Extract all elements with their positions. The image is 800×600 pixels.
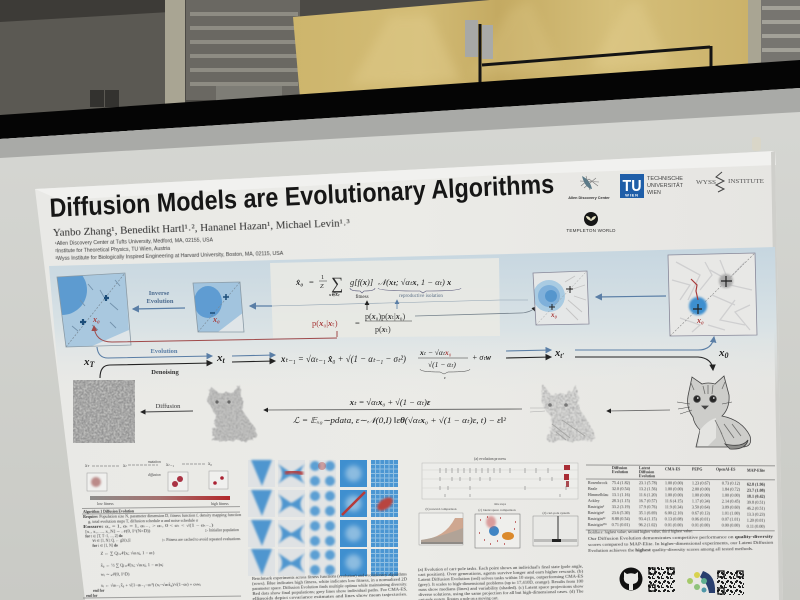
panel: fitness mapping diagram bbox=[84, 460, 230, 506]
table: method comparison: 0.67 (0.13) bbox=[692, 510, 711, 516]
table: method comparison: 28.3 (1.15) bbox=[612, 498, 631, 503]
text: cart-pole caption: (a) Evolution of cart-pole tasks. Each point shows an individual's final state (pole angle, bbox=[418, 564, 583, 573]
table: method comparison: 13.3 (0.23) bbox=[747, 512, 766, 517]
text: benchmark caption: Red dots show final populations; grey lines show individual paths. For CMA-ES, bbox=[252, 586, 407, 597]
equation: posterior mean estimator: ∑ bbox=[331, 274, 343, 293]
panel: algorithm: g, total evolution steps T, diffusion schedule α and noise schedule σ bbox=[88, 519, 198, 525]
table: method comparison: 32.0 (0.54) bbox=[612, 486, 631, 491]
logo: TU Wien: TU bbox=[622, 178, 642, 195]
logo: TU Wien: WIEN bbox=[625, 192, 639, 198]
table: method comparison: 23.6 (5.30) bbox=[612, 510, 631, 515]
panel: fitness mapping diagram: xₜ₋₁ bbox=[165, 463, 174, 468]
equation: posterior mean estimator: fitness bbox=[355, 295, 369, 300]
text: benchmark caption: (rows). Blue indicates high fitness, white indicates low fitness, in a normalized 2D bbox=[252, 576, 407, 587]
table: method comparison: Ackley bbox=[588, 498, 601, 503]
arrow: diffusion 3 bbox=[607, 410, 670, 411]
affiliations bbox=[55, 236, 284, 262]
panel: algorithm: xᵢ ← √αₜ₋₁x̂₀ + √(1−αₜ₋₁−σₜ²) (xᵢ−√αₜx̂₀)/√(1−αₜ) + σₜwᵢ bbox=[101, 582, 201, 588]
label: Denoising: Denoising bbox=[151, 369, 179, 376]
equation: posterior mean estimator: reproductive isolation bbox=[399, 294, 443, 299]
text: cart-pole caption bbox=[418, 564, 584, 600]
panel: formula box bbox=[270, 258, 500, 338]
table: method comparison: Evolution bbox=[612, 470, 629, 474]
label: Inverse Evolution: Inverse bbox=[149, 290, 169, 297]
table: method comparison: 39.8 (0.51) bbox=[747, 500, 766, 505]
text: results summary: Our Diffusion Evolution demonstrates competitive performance on quality-diversity bbox=[588, 534, 774, 541]
table: method comparison: 46.2 (0.51) bbox=[747, 506, 766, 511]
table: method comparison: 0.01 (0.00) bbox=[692, 522, 710, 528]
table: method comparison: 0.00 (0.00) bbox=[722, 523, 740, 528]
table: method comparison: 0.07 (1.01) bbox=[722, 517, 740, 522]
panel: population plot x_T bbox=[56, 272, 132, 348]
panel: algorithm: wᵢ ∼ 𝒩(0, I^D) bbox=[101, 571, 130, 578]
equation: Bayes posterior: p(x₀)p(xₜ|x₀) bbox=[365, 312, 406, 321]
affiliations: ²Institute for Theoretical Physics, TU Wien, Austria bbox=[55, 246, 170, 254]
equation: forward diffusion: xₜ = √αₜx₀ + √(1 − αₜ)ε bbox=[349, 397, 431, 407]
title: Diffusion Models are Evolutionary Algorithms bbox=[49, 169, 555, 223]
icon: QR code 2 bbox=[717, 570, 744, 595]
background: exhibition hall bbox=[0, 0, 800, 130]
equation: Bayes posterior: = bbox=[355, 318, 360, 328]
table: method comparison: PEPG bbox=[692, 467, 702, 472]
panel: fitness mapping diagram: xT bbox=[84, 464, 90, 469]
logo: Wyss Institute: WYSS bbox=[696, 179, 717, 186]
chart: reward comparison: (b) reward comparison bbox=[426, 507, 457, 511]
panel: algorithm: end for bbox=[93, 589, 105, 593]
panel: algorithm: ▷ Initialize population bbox=[205, 528, 239, 533]
panel: algorithm: ∀i ∈ [1, N]: Qᵢ ← g[f(xᵢ)] bbox=[92, 538, 130, 544]
yellow wall bbox=[293, 0, 748, 98]
equation: diffusion loss: ℒ = 𝔼ₓ₀∼pdata, ε∼𝒩(0,I) ‖ε θ(√αₜx₀ + √(1 − αₜ)ε, t) − ε‖² bbox=[293, 416, 507, 425]
panel: algorithm: for t ∈ [T, T−1, ..., 2] do bbox=[85, 534, 123, 539]
text: cart-pole caption: cart position). Over generations, agents survive longer and earn higher rewards. (b) bbox=[418, 569, 584, 578]
arrow: fitness pointer bbox=[366, 301, 368, 310]
panel: fitness mapping diagram: x₀ bbox=[207, 462, 212, 467]
chart: evolution process strip: (a) evolution process bbox=[474, 457, 506, 461]
arrow: x_t evolution bbox=[232, 355, 275, 356]
arrow: denoising to cat bbox=[575, 357, 713, 370]
panel: fitness mapping diagram: mutation bbox=[148, 460, 161, 464]
equation: posterior mean estimator: x∈Xₜ bbox=[328, 292, 340, 297]
table: method comparison: 13.1 (1.16) bbox=[612, 492, 631, 497]
label: Inverse Evolution bbox=[146, 290, 174, 305]
table: method comparison: 23.1 (5.78) bbox=[639, 480, 658, 485]
equation: Bayes posterior bbox=[312, 312, 412, 334]
panel: population plot x_T: x₀ bbox=[92, 315, 100, 324]
symbol: x_T: x bbox=[84, 356, 90, 368]
symbol: x_t': x bbox=[555, 348, 560, 359]
logo: TU Wien: UNIVERSITÄT bbox=[647, 182, 684, 189]
panel: population plot 3 bbox=[532, 270, 590, 326]
table: method comparison: 75.4 (1.82) bbox=[612, 480, 631, 485]
arrow: posterior to plot 3 bbox=[415, 307, 536, 316]
text: results summary: Boldface: highest value; second higher value; third highest value. bbox=[588, 528, 693, 535]
equation: posterior mean estimator: x̂₀ bbox=[295, 277, 303, 287]
affiliations: ³Wyss Institute for Biologically Inspired Engineering at Harvard University, Boston, MA, 02115, USA bbox=[55, 251, 284, 262]
table: method comparison: 1.00 (0.00) bbox=[665, 492, 684, 497]
chart: cart-pole actions: (d) cart-pole system bbox=[542, 511, 570, 515]
image: noisy cat bbox=[208, 385, 257, 441]
arrow: diffusion 1 bbox=[141, 411, 193, 412]
icon: QR code 1 bbox=[648, 567, 675, 592]
arrow: evolution to plot 4 bbox=[575, 337, 714, 350]
arrow: inverse evolution 2 bbox=[250, 305, 272, 307]
stand with grey signs bbox=[465, 20, 711, 85]
table: method comparison: Rastrigin² bbox=[588, 504, 605, 509]
text: cart-pole caption: diverse solutions, using the same projection for all but high-dimensional cases. (d) The bbox=[418, 589, 584, 598]
symbol: x_T: T bbox=[90, 360, 96, 369]
logo: Allen Discovery Center bbox=[568, 176, 610, 200]
panel: fitness mapping diagram: high fitness bbox=[211, 502, 229, 506]
arrow: evolution path bbox=[97, 347, 212, 358]
text: benchmark caption bbox=[252, 571, 408, 600]
logo: Wyss Institute: INSTITUTE bbox=[728, 179, 764, 185]
text: benchmark caption: parameter space. Diffusion Evolution finds multiple optima while maintaining diversity. bbox=[252, 581, 407, 591]
chart: evolution process strip bbox=[422, 457, 578, 506]
chart: benchmark fitness landscape grid bbox=[248, 460, 398, 576]
table: method comparison: Beale bbox=[588, 486, 597, 491]
text: results summary: scores compared to MAP-Elite. In higher-dimensional experiments, our Latent Diffusion bbox=[588, 540, 774, 548]
table: method comparison: 11.6 (4.15) bbox=[665, 498, 683, 503]
table: method comparison: 23.7 (1.08) bbox=[747, 488, 766, 493]
table: method comparison: 1.01 (1.00) bbox=[722, 511, 741, 516]
table: method comparison: 0.73 (0.12) bbox=[722, 481, 741, 486]
panel: population plot 4: x₀ bbox=[696, 316, 704, 325]
table: method comparison: 1.00 (0.00) bbox=[665, 486, 684, 491]
panel: fitness mapping diagram: low fitness bbox=[97, 502, 114, 506]
panel: algorithm: x̂₀ ← ½ ∑ Qⱼ 𝒩(xᵢ; √αₜxⱼ, 1 − αₜ)xⱼ bbox=[101, 562, 163, 569]
equation: posterior mean estimator bbox=[295, 274, 461, 300]
table: method comparison: 1.00 (0.00) bbox=[665, 480, 684, 485]
arrow: to x_t' evolution bbox=[506, 350, 551, 351]
table: method comparison: 17.9 (0.76) bbox=[639, 504, 658, 509]
table: method comparison: 0.13 (0.08) bbox=[665, 516, 683, 521]
table: method comparison: OpenAI-ES bbox=[716, 468, 735, 472]
table: method comparison: 93.4 (1.15) bbox=[639, 516, 657, 521]
symbol: x_t': t′ bbox=[560, 352, 564, 360]
panel: fitness mapping diagram: diffusion bbox=[148, 473, 161, 477]
symbol: x_t: t bbox=[222, 356, 226, 365]
chart: reward comparison bbox=[419, 507, 463, 545]
table: method comparison: 11.6 (1.20) bbox=[639, 492, 657, 497]
label: Evolution: Evolution bbox=[150, 348, 178, 355]
arrow: denoising path bbox=[100, 363, 212, 378]
text: cart-pole caption: runs show medians (lines) and variability (shaded). (c) Latent space projections show bbox=[418, 584, 584, 592]
panel: population plot 2: x₀ bbox=[212, 315, 220, 324]
equation: posterior mean estimator: g[f(x)] bbox=[350, 277, 373, 287]
table: method comparison: 11.9 (0.34) bbox=[665, 504, 683, 509]
table: method comparison: 1.00 (0.00) bbox=[692, 492, 711, 498]
poster sheet bbox=[35, 151, 783, 600]
chart: latent space comparison: (c) latent space comparison bbox=[478, 508, 516, 512]
image: clean kitten bbox=[677, 376, 751, 449]
table: method comparison: 16.7 (0.57) bbox=[639, 498, 658, 503]
table: method comparison: 13.2 (1.56) bbox=[639, 486, 658, 491]
symbol: x_0: 0 bbox=[724, 351, 728, 360]
logo: TU Wien bbox=[620, 174, 684, 198]
panel: algorithm: ▷ Fitness are cached to avoid repeated evaluations bbox=[162, 537, 241, 542]
table: method comparison: 0.06 (0.01) bbox=[692, 516, 710, 522]
table: method comparison: Rastrigin²⁵⁶ bbox=[588, 522, 607, 527]
table: method comparison: 3.50 (0.64) bbox=[692, 504, 711, 510]
equation: DDIM update bbox=[280, 348, 492, 380]
arrow: plot 4 to plot 3 bbox=[596, 296, 666, 297]
authors: Yanbo Zhang¹, Benedikt Hartl¹˒², Hananel Hazan¹, Michael Levin¹˒³ bbox=[53, 218, 350, 239]
table: method comparison: CMA-ES bbox=[665, 467, 680, 471]
table: method comparison bbox=[586, 465, 775, 531]
chart: cart-pole actions bbox=[533, 511, 578, 546]
panel: population plot 2 bbox=[192, 282, 244, 332]
arrow: isolation pointer bbox=[396, 300, 398, 309]
text: cart-pole caption: (grey). It scales to high-dimensional problems (up to 17,410D, orange). Results from 100 bbox=[418, 579, 583, 588]
image: light noisy cat bbox=[530, 384, 595, 441]
table: method comparison: Latent bbox=[639, 466, 651, 470]
panel: algorithm: Algorithm 1 Diffusion Evolution bbox=[83, 509, 134, 514]
panel: algorithm: end for bbox=[86, 594, 98, 598]
table: method comparison: 18.1 (0.42) bbox=[747, 494, 766, 499]
table: method comparison: Rastrigin³² bbox=[588, 516, 606, 521]
icon: neural network logo bbox=[687, 571, 715, 593]
symbol: x_t: x bbox=[217, 352, 222, 364]
black display rail bbox=[0, 60, 800, 139]
label: Diffusion: Diffusion bbox=[156, 403, 181, 410]
panel: fitness mapping diagram: xₜ bbox=[122, 464, 127, 469]
equation: Bayes posterior: p(xₜ) bbox=[375, 325, 391, 334]
panel: algorithm bbox=[82, 507, 242, 598]
table: method comparison: 33.2 (3.19) bbox=[612, 504, 631, 509]
panel: algorithm: Z ← ∑ Qⱼ 𝒩(xᵢ; √αₜxⱼ, 1 − αₜ) bbox=[100, 550, 155, 557]
table: method comparison: 3.09 (0.60) bbox=[722, 505, 741, 510]
equation: posterior mean estimator: Z bbox=[320, 283, 324, 290]
table: method comparison: 6.00 (2.10) bbox=[665, 510, 684, 515]
sign: hall marker bbox=[90, 90, 119, 107]
table: method comparison: 1.20 (0.01) bbox=[747, 518, 765, 523]
table: method comparison: 96.2 (1.02) bbox=[639, 522, 657, 527]
table: method comparison: Rastrigin⁸ bbox=[588, 510, 605, 515]
logo: Templeton World: TEMPLETON WORLD bbox=[566, 228, 616, 233]
affiliations: ¹Allen Discovery Center at Tufts University, Medford, MA, 02155, USA bbox=[55, 237, 214, 247]
equation: posterior mean estimator: = bbox=[309, 277, 314, 287]
logo: Wyss Institute bbox=[696, 172, 764, 192]
table: method comparison: MAP-Elite bbox=[747, 469, 765, 473]
table: method comparison: 0.01 (0.00) bbox=[665, 522, 683, 527]
table: method comparison: 2.14 (0.45) bbox=[722, 499, 741, 504]
equation: posterior mean estimator: 𝒩(xₜ; √αₜx, 1 − αₜ) x bbox=[378, 277, 452, 287]
table: method comparison: Rosenbrock bbox=[588, 480, 608, 485]
panel: algorithm: for i ∈ [1, N] do bbox=[92, 544, 118, 549]
text: cart-pole caption: Latent Diffusion Evolution (red) solves tasks within 10 steps, outperforming CMA-ES bbox=[418, 574, 583, 583]
arrow: red posterior link bbox=[94, 326, 337, 342]
arrow: to x_t' denoising bbox=[506, 357, 551, 358]
equation: DDIM update: ε bbox=[444, 375, 446, 380]
blue header band bbox=[49, 247, 778, 395]
equation: DDIM update: + σₜw bbox=[472, 353, 492, 362]
label: Inverse Evolution: Evolution bbox=[146, 298, 174, 305]
text: results summary bbox=[588, 527, 774, 553]
table: method comparison: 62.8 (1.96) bbox=[747, 482, 766, 487]
logo: Templeton World bbox=[566, 212, 616, 233]
image: pure noise bbox=[73, 380, 135, 443]
chart: evolution process strip: time steps bbox=[494, 502, 507, 506]
table: method comparison: 2.00 (0.00) bbox=[692, 486, 711, 492]
equation: Bayes posterior: p(x₀|xₜ) bbox=[312, 318, 338, 328]
table: method comparison: 1.00 (0.00) bbox=[722, 493, 741, 498]
equation: DDIM update: xₜ₋₁ = √αₜ₋₁ x̂₀ + √(1 − αₜ₋₁ − σₜ²) bbox=[280, 354, 406, 365]
symbol: x_0: x bbox=[719, 347, 724, 359]
panel: algorithm: Ensure: α₀ = 1, αₜ = 1, αₜ₋₁ > αₜ, 0 < σₜ < √(1 − αₜ₋₁) bbox=[83, 523, 214, 530]
logo: Allen Discovery Center: Allen Discovery Center bbox=[568, 196, 610, 200]
table: method comparison: 0.71 (0.01) bbox=[612, 522, 630, 527]
table: method comparison: 1.23 (0.67) bbox=[692, 480, 711, 486]
text: results summary: Evolution achieves the highest quality-diversity scores among all tested methods. bbox=[588, 546, 753, 553]
logo: TU Wien: TECHNISCHE bbox=[647, 176, 683, 182]
equation: posterior mean estimator: 1 bbox=[321, 274, 324, 281]
table: method comparison: 8.88 (0.54) bbox=[612, 516, 630, 521]
panel: population plot 4 bbox=[668, 253, 757, 336]
equation: DDIM update: √(1 − αₜ) bbox=[428, 360, 456, 369]
arrow: x_t denoising bbox=[232, 361, 275, 362]
table: method comparison: 35.1 (6.69) bbox=[639, 510, 658, 515]
icon: GitHub bbox=[620, 568, 642, 590]
table: method comparison: Diffusion bbox=[612, 466, 628, 470]
panel: algorithm: Require: Population size N, parameter dimension D, fitness function f, density mapping function bbox=[83, 513, 241, 520]
chart: latent space comparison bbox=[475, 508, 520, 548]
table: method comparison: Diffusion bbox=[639, 470, 655, 474]
arrow: diffusion 2 bbox=[264, 409, 522, 410]
arrow: inverse evolution 1 bbox=[133, 308, 185, 309]
logo: TU Wien: WIEN bbox=[647, 190, 661, 196]
table: method comparison: 1.84 (0.72) bbox=[722, 487, 741, 492]
panel: algorithm: [x₁, x₂, ..., x_N] ∼ 𝒩(0, I^(N×D)) bbox=[85, 529, 151, 535]
table: method comparison: 1.17 (0.34) bbox=[692, 498, 711, 504]
equation: DDIM update: xₜ − √αₜx₀ bbox=[419, 348, 452, 357]
table: method comparison: Himmelblau bbox=[588, 492, 608, 497]
text: benchmark caption: Benchmark experiments across fitness functions (evolution) and evolutionary algorithms bbox=[252, 571, 407, 581]
table: method comparison: 0.11 (0.00) bbox=[747, 524, 765, 529]
panel: population plot 3: x₀ bbox=[550, 311, 558, 319]
table: method comparison: Evolution bbox=[639, 474, 656, 478]
